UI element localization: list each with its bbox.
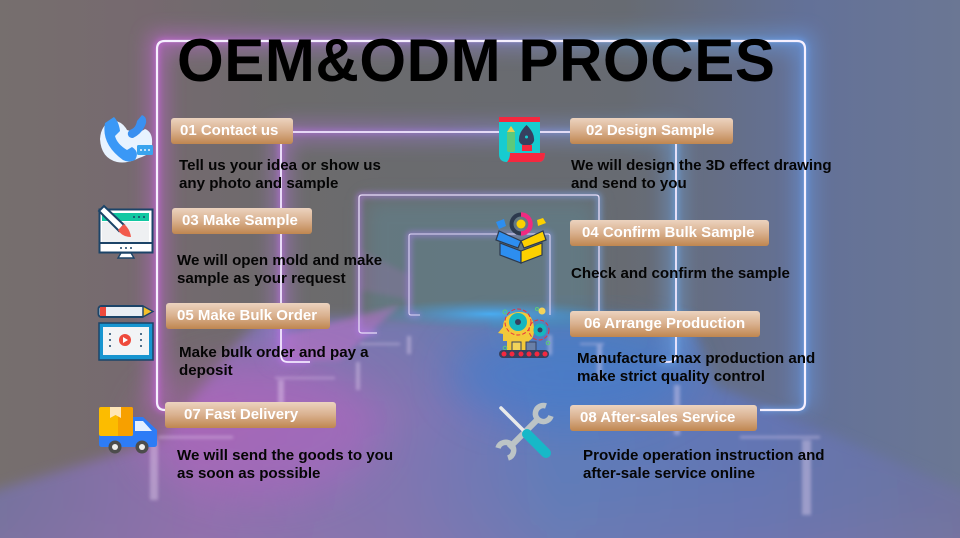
step 01 text <box>179 157 381 192</box>
step 02 text: and send to you <box>571 175 687 192</box>
step 03 label <box>172 208 312 234</box>
step 01 text: any photo and sample <box>179 175 338 192</box>
step 01 label <box>171 118 293 144</box>
step 05 text <box>179 344 369 379</box>
icon: video pencil <box>98 305 154 361</box>
step 01 label: 01 Contact us <box>180 122 278 139</box>
step 08 text: after-sale service online <box>583 465 755 482</box>
icon: design pen <box>499 117 545 162</box>
wide glow <box>157 41 805 408</box>
step 03 label: 03 Make Sample <box>182 212 298 229</box>
step 04 text: Check and confirm the sample <box>571 265 790 282</box>
step 08 label: 08 After-sales Service <box>580 409 735 426</box>
step 02 text: We will design the 3D effect drawing <box>571 157 832 174</box>
step 02 label: 02 Design Sample <box>586 122 714 139</box>
tight glow <box>157 41 805 410</box>
step 05 text: deposit <box>179 362 233 379</box>
step 03 text <box>177 252 382 287</box>
icon: delivery truck <box>99 407 157 454</box>
step 02 text <box>571 157 832 192</box>
icon: monitor with brush <box>98 204 154 259</box>
step 06 text <box>577 350 815 385</box>
step 08 label <box>570 405 757 431</box>
step 05 text: Make bulk order and pay a <box>179 344 369 361</box>
icon: open box with gear <box>495 212 547 264</box>
step 06 text: Manufacture max production and <box>577 350 815 367</box>
floor reflections <box>150 335 820 515</box>
step 06 text: make strict quality control <box>577 368 765 385</box>
step 07 label <box>165 402 336 428</box>
step 05 label <box>166 303 330 329</box>
step 06 label: 06 Arrange Production <box>584 315 745 332</box>
step 08 text <box>583 447 825 482</box>
step 05 label: 05 Make Bulk Order <box>177 307 317 324</box>
neon lines <box>157 41 805 410</box>
icon: head with gears <box>498 307 550 358</box>
step 06 label <box>570 311 760 337</box>
step 03 text: sample as your request <box>177 270 346 287</box>
step 02 label <box>570 118 733 144</box>
step 03 text: We will open mold and make <box>177 252 382 269</box>
step 07 text: We will send the goods to you <box>177 447 393 464</box>
step 01 text: Tell us your idea or show us <box>179 157 381 174</box>
icon: tools <box>496 402 554 460</box>
step 07 text <box>177 447 393 482</box>
step 07 text: as soon as possible <box>177 465 320 482</box>
step 07 label: 07 Fast Delivery <box>184 406 298 423</box>
step 04 label: 04 Confirm Bulk Sample <box>582 224 755 241</box>
step 04 label <box>570 220 769 246</box>
icon: phone contact <box>100 115 153 162</box>
step 08 text: Provide operation instruction and <box>583 447 825 464</box>
title: OEM&ODM PROCES <box>177 27 775 94</box>
